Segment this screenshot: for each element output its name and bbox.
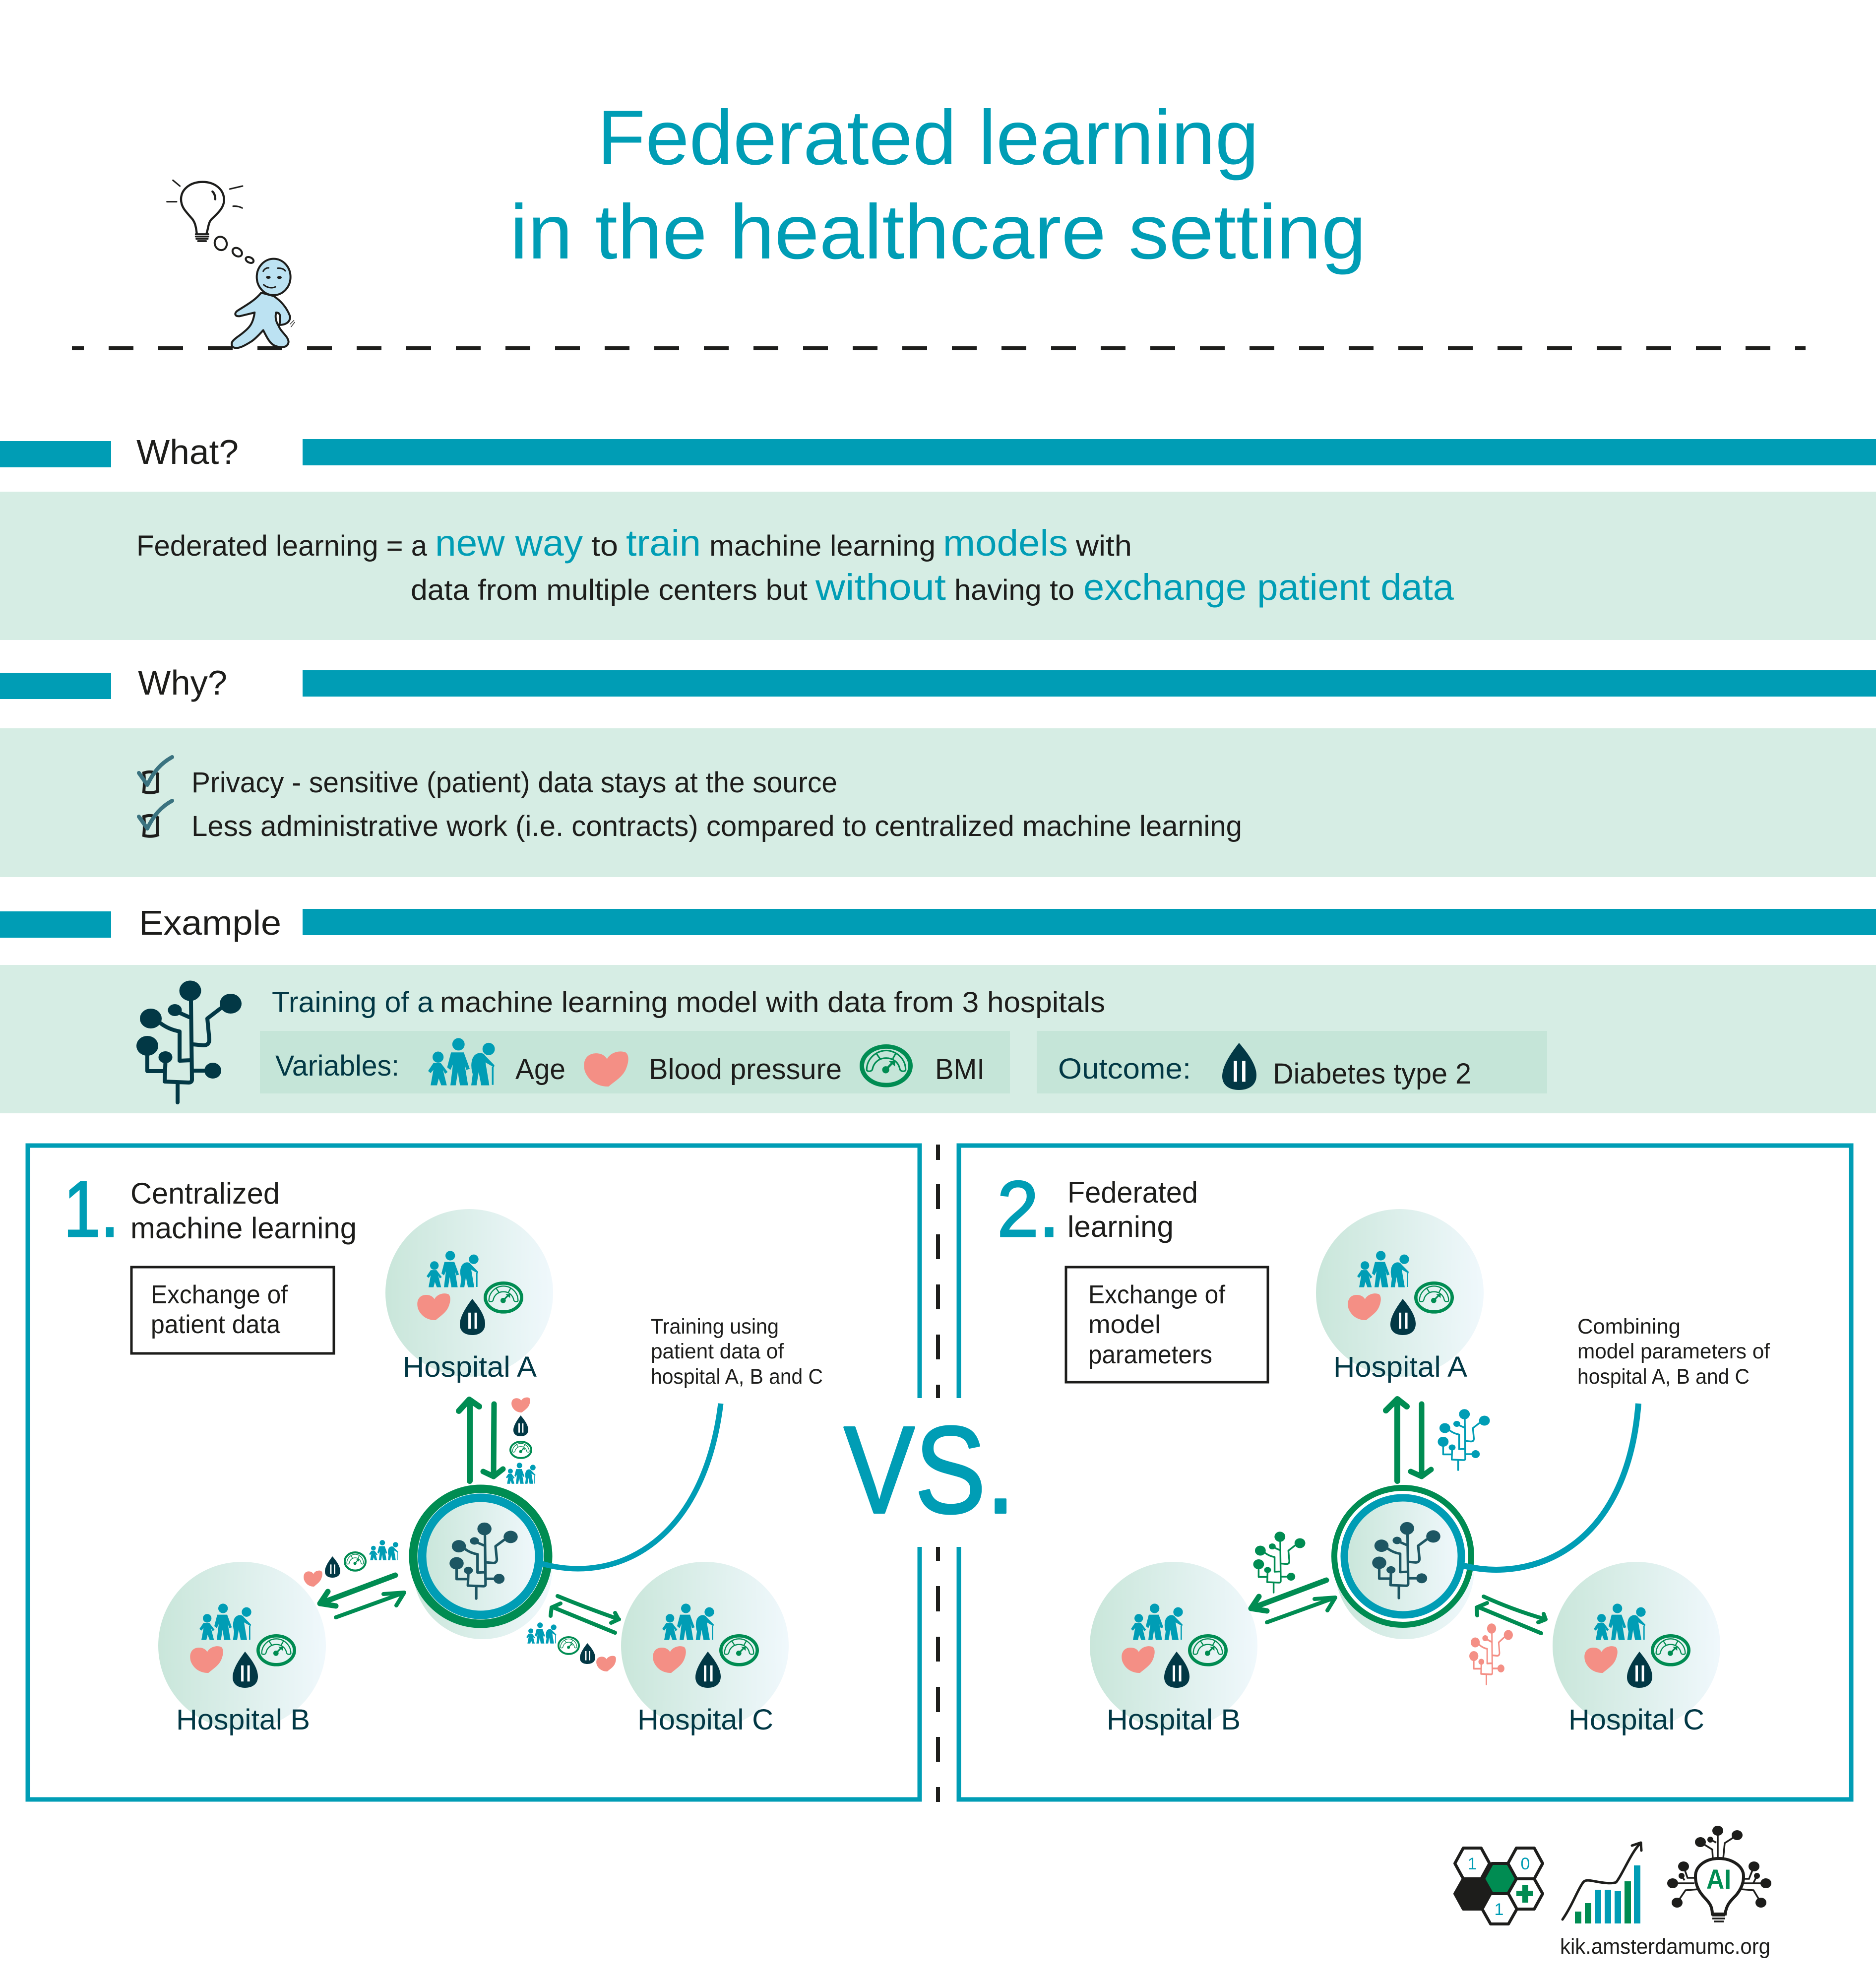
example sentence: Training of a [272,986,434,1019]
callout text: training: hospital A, B and C [651,1365,823,1389]
arrows: hospital A and server [459,1400,503,1481]
callout curve: training [542,1404,721,1569]
panel: what definition: Federated learning = a [136,530,428,562]
icon: salmon model [1469,1623,1513,1684]
callout text: training: patient data of [651,1340,784,1363]
box: exchange of model parameters [1066,1267,1268,1382]
logo: hexagons [1455,1848,1543,1924]
panel: example [0,965,1876,1113]
icon: machine learning tree [136,980,242,1102]
icon: green model [1253,1532,1306,1593]
box: variables: Age [515,1053,565,1086]
box: variables: Blood pressure [649,1053,842,1086]
box: exchange of patient data: Exchange of [151,1280,288,1309]
icon: checkbox one [139,757,172,793]
panel: what definition: machine learning [709,530,936,562]
hospital A (federated): Hospital A [1333,1351,1467,1383]
hospital A (centralized): Hospital A [403,1351,537,1383]
callout text: combining: model parameters of [1577,1340,1770,1363]
reason texts: Less administrative work (i.e. contracts) compared to centralized machine learning [191,810,1242,842]
data icons travelling to hospital A [506,1398,536,1484]
panel: what definition: without [815,567,946,608]
hospital B (federated): Hospital B [1107,1704,1241,1736]
panel: what definition: with [1075,530,1132,562]
hospital C (federated): Hospital C [1568,1704,1704,1736]
hospital C (centralized): Hospital C [637,1704,773,1736]
arrows: federated hospital B and server [1251,1580,1335,1622]
panel: what definition: exchange patient data [1083,567,1454,608]
hospital B (federated) [1090,1562,1257,1736]
box: exchange of patient data: patient data [151,1310,280,1339]
website url: kik.amsterdamumc.org [1560,1934,1770,1959]
title: Federated learning [597,95,1259,181]
panel frame: centralized (left) [28,1146,920,1799]
dashed ground line [72,346,1806,350]
panel: what definition: to [591,530,618,562]
reason texts: Privacy - sensitive (patient) data stays at the source [191,767,837,799]
panel frame: federated (right) [959,1146,1851,1799]
centre dashed road [936,1145,940,1802]
box: outcome [1037,1031,1547,1093]
central server (federated) [1334,1488,1474,1639]
section heading: What? [0,433,1876,471]
panel: what definition: models [943,522,1068,564]
data icons travelling to hospital C [526,1622,616,1671]
box: exchange of model parameters: parameters [1088,1341,1212,1369]
logo: AI light bulb [1667,1826,1771,1921]
callout text: training: Training using [651,1315,779,1339]
box: exchange of model parameters: model [1088,1310,1161,1339]
logo: hexagons: 1 [1495,1900,1503,1919]
box: outcome: Diabetes type 2 [1273,1058,1471,1090]
hospital C (centralized) [621,1562,789,1736]
title: in the healthcare setting [510,189,1366,275]
arrows: hospital C and server [551,1596,619,1633]
panel 2 heading: Federated [1067,1176,1198,1209]
VS label: VS. [844,1401,1015,1539]
hospital A (federated) [1316,1209,1484,1383]
panel 1 number: 1. [63,1164,119,1253]
data icons travelling to hospital B [304,1540,398,1587]
logo: hexagons: 0 [1521,1855,1530,1873]
panel 1 heading: machine learning [130,1212,357,1245]
callout text: combining [1577,1315,1770,1389]
panel: why reasons [0,728,1876,877]
icon: teal model [1438,1409,1490,1470]
box: exchange of model parameters: Exchange of [1088,1280,1226,1309]
panel: what definition: data from multiple centers but [411,574,808,606]
example sentence: machine learning model with data from 3 hospitals [440,986,1105,1019]
callout text: combining: hospital A, B and C [1577,1365,1750,1389]
logo: bar chart with arrow [1563,1843,1641,1923]
panel 1 heading: Centralized [130,1177,280,1210]
central server (centralized) [413,1489,552,1639]
arrows: federated hospital C and server [1477,1597,1546,1633]
panel: what definition: having to [954,574,1074,606]
hospital A (centralized) [385,1209,553,1383]
box: outcome: Outcome: [1058,1053,1191,1085]
callout text: training [651,1315,823,1389]
section heading: Why?: Why? [138,663,227,702]
box: variables: Variables: [275,1050,399,1082]
box: exchange of patient data [131,1267,334,1353]
callout curve: combining [1464,1404,1638,1570]
reason texts [191,767,1242,842]
box: variables: BMI [935,1053,985,1086]
arrows: federated hospital A and server [1386,1399,1431,1481]
section heading: Example: Example [139,903,281,942]
panel: what definition: new way [435,522,583,564]
icon: gauge [862,1046,911,1085]
hospital C (federated) [1553,1562,1720,1736]
icon: checkbox two [139,801,172,836]
logo: AI light bulb: AI [1706,1863,1731,1895]
panel 2 heading [1067,1176,1198,1243]
title [510,95,1366,275]
panel 2 number: 2. [997,1164,1060,1253]
hospital B (centralized): Hospital B [176,1704,310,1736]
box: variables [260,1031,1010,1093]
section heading: Why? [0,663,1876,702]
section heading: What?: What? [136,433,239,471]
panel: what definition: train [626,522,701,564]
callout text: combining: Combining [1577,1315,1681,1339]
panel 1 heading [130,1177,357,1245]
arrows: hospital B and server [320,1575,404,1617]
icon: age family [428,1038,495,1086]
icon: heart [584,1051,628,1087]
logo: hexagons: 1 [1468,1855,1477,1873]
icon: blood drop [1222,1043,1256,1090]
section heading: Example [0,903,1876,942]
panel 2 heading: learning [1067,1210,1174,1243]
hospital B (centralized) [158,1562,326,1736]
panel: what definition [0,492,1876,640]
icon: thinking character with light bulb [167,180,295,348]
